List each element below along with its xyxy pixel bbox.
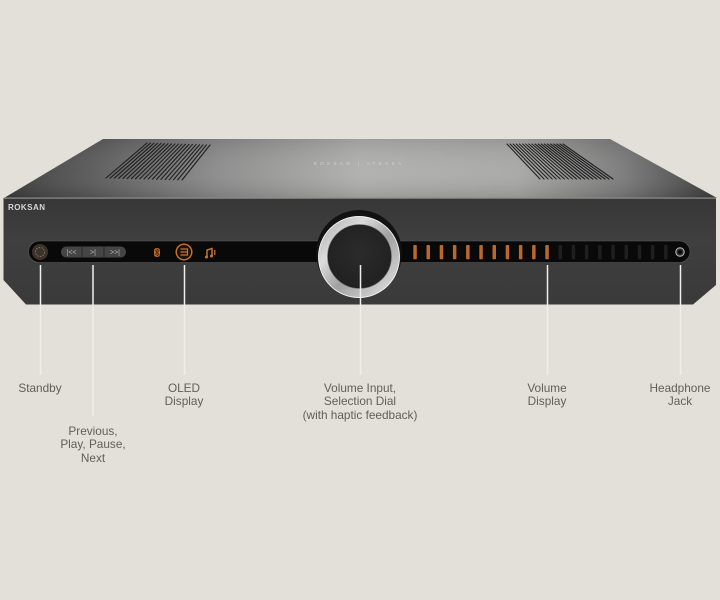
display strip <box>28 241 690 262</box>
amplifier top panel <box>4 139 717 198</box>
left vent grille <box>106 143 210 180</box>
standby button <box>32 244 48 260</box>
transport buttons: >| <box>90 250 96 256</box>
label: standby: Standby <box>18 381 62 395</box>
brand logo: ROKSAN <box>8 203 45 212</box>
callout lines <box>40 265 680 416</box>
label: headphone jack: Jack <box>668 394 692 408</box>
label: volume display: Display <box>528 394 566 408</box>
icon: bluetooth <box>154 248 160 257</box>
icon: music note <box>205 248 216 258</box>
label: previous, play, pause, next: Previous, <box>68 424 118 438</box>
volume display: unlit bars <box>558 245 668 259</box>
icon: OLED source ring <box>176 244 192 260</box>
headphone jack <box>676 248 684 256</box>
label: OLED display: Display <box>165 394 203 408</box>
label: OLED display: OLED <box>168 381 200 395</box>
amplifier front panel <box>4 198 716 304</box>
right vent grille <box>507 144 613 179</box>
label: volume input, selection dial: Volume Input, <box>324 381 396 395</box>
transport buttons: >>| <box>110 250 120 256</box>
label: volume input, selection dial: (with haptic feedback) <box>303 408 417 422</box>
transport buttons <box>61 246 126 258</box>
volume display: lit bars <box>413 245 549 259</box>
top panel logo: ROKSAN | ATESSA <box>314 161 404 166</box>
volume dial <box>316 210 402 298</box>
label: headphone jack: Headphone <box>649 381 711 395</box>
front panel top highlight <box>4 198 716 199</box>
label: volume display: Volume <box>527 381 567 395</box>
transport buttons: |<< <box>66 250 76 256</box>
label: previous, play, pause, next: Play, Pause, <box>60 437 126 451</box>
label: previous, play, pause, next: Next <box>81 451 106 465</box>
label: volume input, selection dial: Selection Dial <box>324 394 396 408</box>
